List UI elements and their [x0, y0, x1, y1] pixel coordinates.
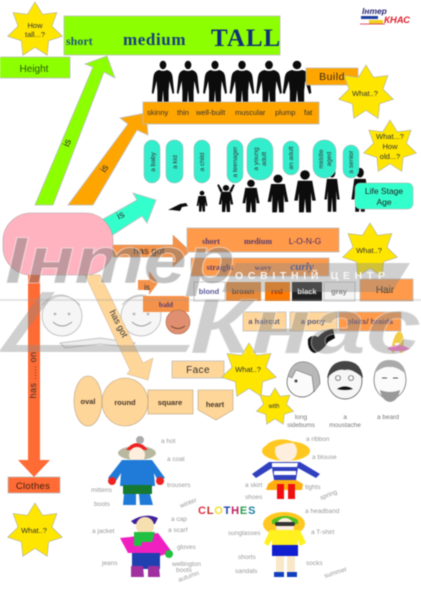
build labels: well-built: [195, 108, 226, 117]
arrow: is bald: [138, 271, 158, 295]
icon: face with moustache: [327, 361, 363, 399]
labels: summer: summer: [323, 566, 349, 580]
labels: winter: a coat: [167, 456, 185, 463]
hair styles row: a pony: [301, 317, 326, 326]
watermark: Кнас: [190, 282, 421, 370]
face shapes: square: [158, 398, 182, 407]
star: with: [256, 388, 294, 424]
hair colour row: gray: [331, 287, 348, 296]
build labels: fat: [304, 108, 313, 117]
build labels: muscular: [235, 108, 266, 117]
hair type row: straight: [207, 263, 234, 272]
figure: spring: [252, 439, 320, 499]
hair length row: L-O-N-G: [289, 236, 321, 246]
labels: summer: sunglasses: [228, 530, 261, 537]
life stage pills: middle: [318, 149, 325, 169]
labels: autumn: a scarf: [168, 527, 188, 534]
labels: autumn: jeans: [101, 560, 118, 567]
life stage pills: a young: [253, 147, 260, 171]
figure: winter: [108, 436, 165, 505]
height label: [0, 57, 70, 78]
figure: summer: [263, 512, 306, 577]
labels: spring: a skirt: [245, 482, 263, 489]
life stage pills: [144, 138, 359, 183]
watermark: Інтер: [5, 223, 235, 297]
star: what hair: What..?: [356, 246, 382, 255]
hair length row: short: [202, 237, 220, 246]
height scale panel: [64, 16, 281, 55]
face shapes: heart: [206, 400, 225, 409]
face shapes: round: [114, 398, 136, 407]
clothes box: [8, 477, 60, 493]
life stage pills: a baby: [150, 151, 157, 172]
hair type row: curly: [290, 261, 314, 273]
star: with: with: [268, 404, 279, 410]
labels: winter: a hot: [161, 438, 176, 445]
star: what build: What..?: [352, 89, 378, 98]
star: how old: What...?: [376, 132, 404, 141]
labels: winter: mittens: [91, 487, 113, 494]
feature labels: a beard: [377, 414, 399, 421]
arrow: has got face: has got: [108, 308, 130, 340]
feature labels: [287, 414, 399, 429]
arrow: has on: has ..... on: [28, 352, 38, 398]
hair colour row: red: [271, 287, 283, 296]
arrow: has on: [18, 275, 50, 477]
star: what clothes: What..?: [21, 526, 47, 535]
build silhouettes: [152, 61, 311, 102]
hair box: [360, 279, 413, 301]
hair colour row: blond: [199, 287, 220, 296]
arrow: has got face: [85, 275, 153, 380]
feature labels: a: [343, 414, 347, 421]
labels: spring: a ribbon: [306, 436, 330, 443]
central pink shape: [3, 213, 113, 275]
hair type row: [191, 258, 329, 276]
life stage pills: a child: [199, 152, 206, 171]
labels: spring: [245, 436, 339, 502]
labels: spring: a blouse: [312, 454, 337, 461]
bald box: bald: [159, 300, 174, 309]
life stage pills: adult: [261, 152, 268, 166]
life stage pills: a senior: [348, 150, 355, 174]
kids reading illustration: [42, 295, 161, 348]
labels: spring: spring: [319, 489, 339, 502]
arrow: is life stage: is: [115, 209, 127, 222]
labels: winter: trousers: [167, 482, 191, 489]
clothes title: CLOTHES: [198, 505, 256, 517]
star: what hair: [343, 223, 397, 276]
hair type row: wavy: [255, 263, 272, 272]
labels: summer: a T-shirt: [311, 529, 335, 536]
logo: Інтер: [362, 6, 387, 16]
bald box: [143, 296, 189, 312]
labels: autumn: boots: [176, 567, 193, 574]
hair styles row: [243, 312, 401, 331]
life stage box: Age: [376, 197, 392, 207]
star: how old: old...?: [380, 152, 400, 161]
star: what clothes: [8, 503, 62, 556]
labels: autumn: wellington: [171, 561, 201, 568]
arrow: is height: [35, 56, 115, 205]
star: what face: What..?: [235, 365, 261, 374]
star: how tall: [8, 2, 62, 55]
life stage pills: aged: [326, 151, 333, 166]
hair colour row: black: [297, 287, 317, 296]
hair styles row: a haircut: [248, 317, 280, 326]
build labels: thin: [177, 108, 189, 117]
logo: КНАС: [384, 15, 410, 26]
arrow: is bald: is: [144, 283, 150, 292]
face box: Face: [186, 365, 210, 376]
labels: winter: [91, 438, 199, 510]
labels: autumn: autumn: [177, 570, 200, 584]
labels: spring: tights: [305, 484, 321, 491]
watermark: [0, 223, 421, 370]
hair box: Hair: [376, 285, 395, 296]
arrow: is life stage: [98, 193, 156, 238]
icon: face with beard: [374, 360, 406, 402]
hair styles row: plaits/ braids: [347, 317, 393, 326]
arrow: is build: is: [98, 163, 111, 175]
star: how old: How: [382, 142, 398, 151]
life stage pills: a teenager: [232, 146, 239, 178]
figure: autumn: [120, 516, 173, 577]
arrow: has got hair: [113, 235, 190, 267]
height scale panel: TALL: [211, 25, 281, 52]
labels: summer: sandals: [235, 568, 258, 575]
labels: spring: shoes: [245, 494, 263, 501]
star: what build: [339, 65, 393, 118]
build labels: [143, 102, 319, 124]
icon: bald head: [166, 310, 190, 334]
star: how old: [364, 120, 416, 171]
clothes box: Clothes: [16, 481, 50, 492]
star: how tall: How: [27, 21, 43, 30]
life stage silhouettes: [168, 168, 369, 212]
life stage box: [355, 183, 413, 209]
icon: ponytail: [308, 329, 335, 353]
star: what face: [222, 343, 276, 396]
arrow: has got hair: has got: [133, 246, 165, 257]
labels: autumn: [92, 516, 201, 584]
life stage pills: a kid: [172, 155, 179, 169]
life stage pills: an adult: [288, 146, 295, 170]
watermark: ОСВІТНІЙ ЦЕНТР: [235, 269, 385, 282]
labels: summer: socks: [306, 560, 323, 567]
height scale panel: medium: [123, 30, 186, 49]
face box: [172, 361, 224, 378]
labels: autumn: gloves: [177, 544, 197, 551]
hair length row: [187, 228, 339, 252]
arrow: is build: [68, 113, 148, 205]
hair colour row: brown: [232, 287, 255, 296]
icon: face with sideburns: [287, 362, 320, 397]
labels: winter: boots: [94, 501, 111, 508]
height label: Height: [20, 64, 49, 75]
feature labels: moustache: [329, 422, 361, 429]
build box: [306, 68, 358, 85]
labels: summer: [228, 508, 349, 580]
labels: winter: winter: [178, 497, 199, 510]
labels: summer: a headband: [305, 508, 340, 515]
build box: Build: [319, 71, 345, 83]
face shapes: [74, 376, 233, 426]
star: how tall: tall...?: [25, 30, 45, 39]
face shapes: oval: [80, 397, 96, 406]
build labels: skinny: [147, 108, 169, 117]
build labels: plump: [275, 108, 295, 117]
height scale panel: short: [66, 34, 93, 48]
labels: autumn: a cap: [171, 516, 187, 523]
arrow: is height: is: [61, 138, 74, 148]
labels: summer: shorts: [238, 554, 256, 561]
feature labels: long: [295, 414, 308, 421]
feature labels: sidebums: [287, 422, 316, 429]
hair colour row: [194, 282, 355, 301]
hair length row: medium: [244, 237, 272, 246]
icon: girl with braids: [387, 332, 410, 353]
labels: autumn: a jacket: [92, 528, 115, 535]
life stage box: Life Stage: [365, 186, 403, 196]
logo: [360, 6, 410, 26]
